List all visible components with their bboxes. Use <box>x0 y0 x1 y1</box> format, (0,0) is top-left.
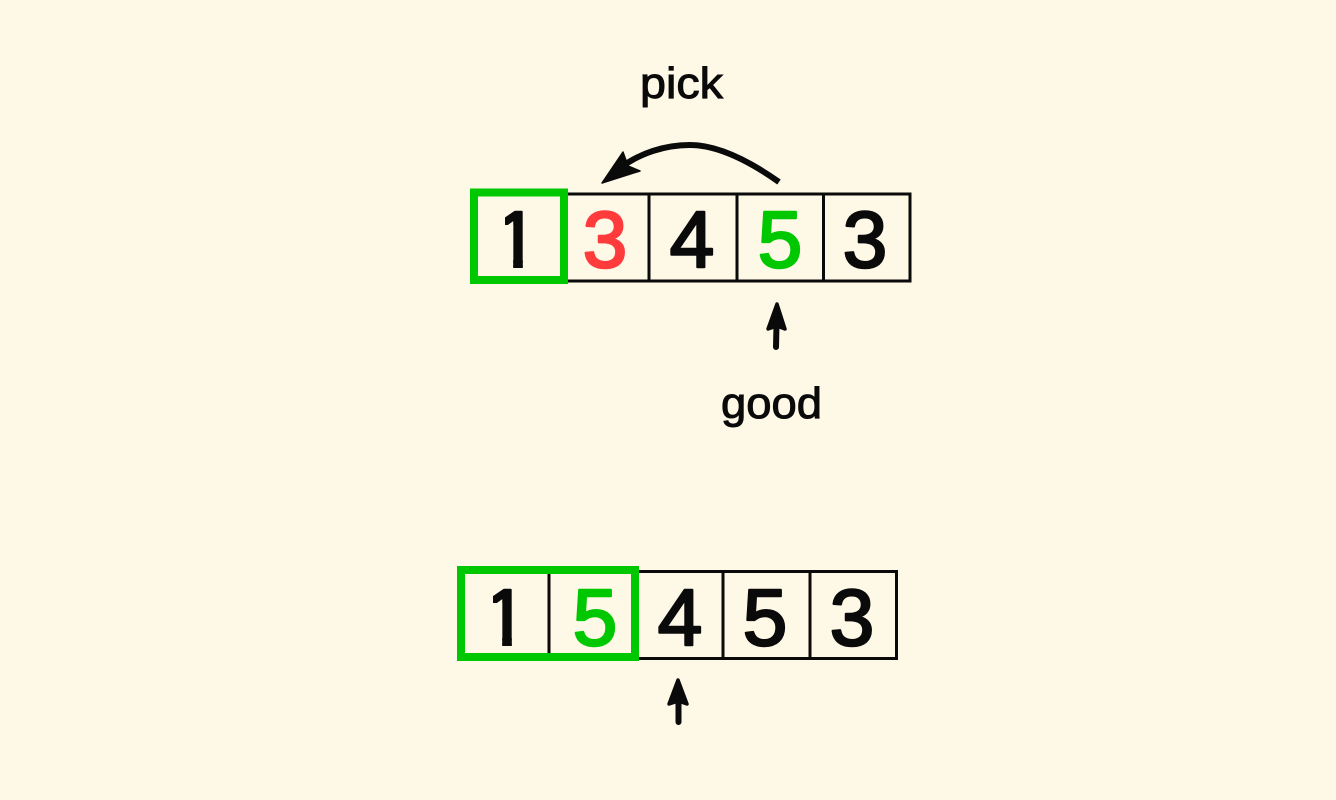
top array <box>474 192 910 284</box>
value 1: 1 <box>483 573 528 662</box>
value 3 red: 3 <box>583 195 627 284</box>
arrow: pick moves left <box>602 145 779 183</box>
bottom array <box>461 570 896 662</box>
value 5 green: 5 <box>573 573 617 662</box>
label: pick: pick <box>640 59 724 108</box>
sorted highlight box <box>474 192 564 280</box>
value 5 green: 5 <box>758 195 802 284</box>
value 4: 4 <box>658 573 702 662</box>
value 4: 4 <box>670 195 714 284</box>
value 5: 5 <box>743 573 787 662</box>
arrow: up pointer to 5 <box>768 304 785 347</box>
value 3: 3 <box>843 195 887 284</box>
label: good: good <box>721 379 822 428</box>
value 3: 3 <box>830 573 874 662</box>
value 1: 1 <box>494 195 539 284</box>
arrow: up pointer to 4 <box>669 680 687 722</box>
sorted highlight box <box>461 570 635 657</box>
